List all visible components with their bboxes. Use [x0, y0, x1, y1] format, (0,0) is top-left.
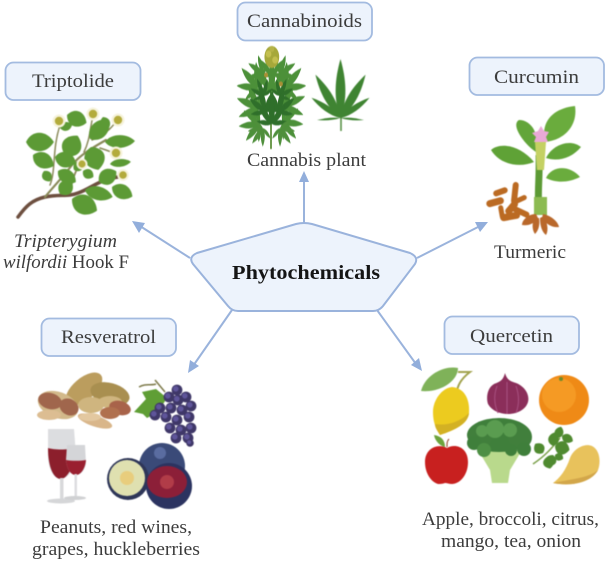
- icon: cannabis leaf: [310, 59, 371, 131]
- icon: mango: [553, 445, 600, 484]
- caption: Peanuts, red wines, grapes, huckleberries: [32, 517, 200, 560]
- caption: Apple, broccoli, citrus, mango, tea, onion: [422, 509, 599, 552]
- icon: tea sprig: [531, 425, 575, 470]
- icon: tripterygium branch: [18, 108, 135, 220]
- arrow: to cannabinoids: [299, 171, 309, 224]
- caption: Turmeric: Turmeric: [494, 242, 566, 263]
- central pentagon: Phytochemicals: Phytochemicals: [232, 262, 380, 284]
- label box: Quercetin: Quercetin: [470, 326, 554, 347]
- label box: Cannabinoids: Cannabinoids: [247, 11, 362, 32]
- icon: apple: [425, 435, 468, 484]
- icon: lemon with leaf: [421, 367, 470, 435]
- arrow: to resveratrol: [188, 310, 232, 373]
- icon: grapes: [134, 380, 196, 447]
- caption: Tripterygium wilfordii Hook F: [3, 231, 129, 273]
- label box: Quercetin: [444, 316, 579, 354]
- label box: Cannabinoids: [238, 2, 372, 40]
- arrow: to triptolide: [132, 221, 190, 258]
- label box: Triptolide: [6, 62, 140, 100]
- caption: Tripterygium wilfordii Hook F: Tripterygium: [14, 231, 117, 252]
- label box: Resveratrol: [42, 318, 176, 356]
- icon: orange: [539, 375, 589, 425]
- caption: Cannabis plant: Cannabis plant: [247, 150, 367, 171]
- label box: Curcumin: Curcumin: [494, 67, 580, 88]
- label box: Resveratrol: Resveratrol: [61, 327, 156, 348]
- icon: huckleberries: [107, 443, 192, 509]
- icon: red onion: [487, 373, 528, 414]
- central pentagon: Phytochemicals: [191, 223, 416, 311]
- caption: Apple, broccoli, citrus, mango, tea, onion: mango, tea, onion: [441, 531, 582, 552]
- icon: turmeric plant: [485, 106, 581, 235]
- arrow: to curcumin: [417, 222, 488, 258]
- caption: Apple, broccoli, citrus, mango, tea, onion: Apple, broccoli, citrus,: [422, 509, 599, 530]
- caption: Peanuts, red wines, grapes, huckleberries: grapes, huckleberries: [32, 539, 200, 560]
- icon: wine glasses: [47, 429, 86, 504]
- arrow: to quercetin: [377, 310, 422, 371]
- caption: Tripterygium wilfordii Hook F: wilfordii Hook F: [3, 252, 129, 273]
- icon: broccoli: [467, 418, 532, 483]
- caption: Peanuts, red wines, grapes, huckleberries: Peanuts, red wines,: [40, 517, 192, 538]
- icon: peanuts: [34, 366, 132, 432]
- icon: cannabis plant: [230, 46, 313, 153]
- label box: Triptolide: Triptolide: [32, 71, 114, 92]
- label box: Curcumin: [470, 58, 604, 95]
